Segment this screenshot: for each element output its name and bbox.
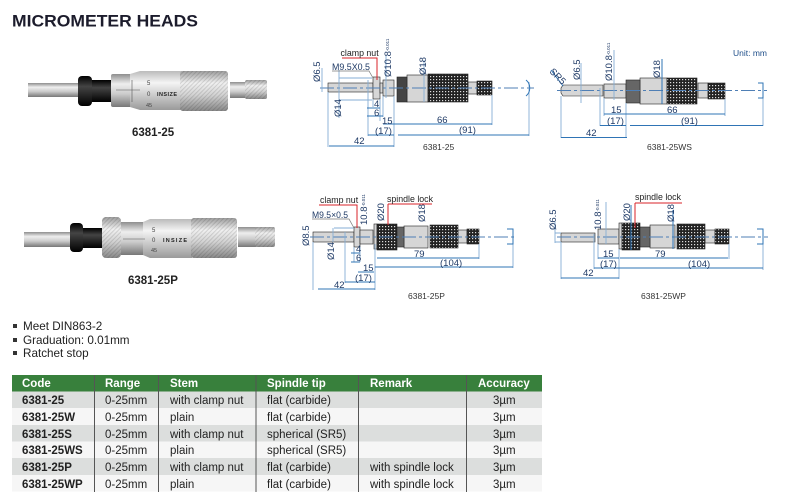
table rows: with spindle lock	[369, 479, 454, 491]
table rows: 3µm	[493, 395, 516, 407]
drawing: 6381-25P: spindle lock	[387, 194, 434, 204]
table rows: flat (carbide)	[267, 462, 331, 474]
drawing: 6381-25WP: 6381-25WP	[641, 291, 686, 301]
table rows: with clamp nut	[169, 429, 244, 441]
drawing: 6381-25P: 10.8	[359, 206, 370, 225]
drawing: 6381-25: Ø10.8	[383, 51, 394, 77]
photo: micrometer head 6381-25P: 45	[151, 248, 157, 254]
drawing: 6381-25WS: (91)	[681, 116, 698, 127]
drawing: 6381-25P: 6	[356, 253, 361, 264]
table rows: plain	[170, 445, 194, 457]
drawing: 6381-25WP: (17)	[600, 259, 617, 270]
drawing: 6381-25WS: 15	[611, 105, 622, 116]
table rows: with clamp nut	[169, 395, 244, 407]
drawing: 6381-25P: clamp nut	[320, 195, 359, 205]
drawing: 6381-25: Ø18	[418, 57, 429, 75]
table header: Accuracy	[478, 378, 530, 390]
drawing: 6381-25WS: (17)	[607, 116, 624, 127]
drawing: 6381-25: (91)	[459, 125, 476, 136]
photo label 6381-25P: 6381-25P	[128, 275, 178, 287]
drawing: 6381-25WS: Ø18	[652, 60, 663, 78]
drawing: 6381-25: 15	[382, 116, 393, 127]
drawing: 6381-25: (17)	[375, 126, 392, 137]
drawing: 6381-25P: (104)	[440, 258, 462, 269]
table header: Stem	[170, 378, 198, 390]
drawing: 6381-25WP: -0.011	[595, 199, 600, 212]
feature list: Graduation: 0.01mm	[23, 334, 130, 347]
table rows	[12, 375, 542, 492]
feature list: Meet DIN863-2	[23, 320, 102, 333]
specification table	[12, 375, 542, 492]
table rows: 6381-25S	[22, 429, 72, 441]
table rows: 3µm	[493, 412, 516, 424]
drawing: 6381-25WS	[547, 42, 767, 152]
drawing: 6381-25WS: -0.011	[606, 42, 611, 55]
drawing: 6381-25WS: 66	[667, 105, 678, 116]
table rows: 0-25mm	[105, 395, 147, 407]
drawing: 6381-25WP: 42	[583, 268, 594, 279]
table rows: 6381-25P	[22, 462, 72, 474]
drawing: 6381-25WP: 79	[655, 249, 666, 260]
drawing: 6381-25WS: Ø6.5	[572, 59, 583, 80]
drawing: 6381-25WS: Ø10.8	[604, 55, 615, 81]
table rows: plain	[170, 479, 194, 491]
drawing: 6381-25P: 15	[363, 263, 374, 274]
table rows: 6381-25	[22, 395, 65, 407]
photo: micrometer head 6381-25: 0	[147, 92, 151, 98]
table rows: 3µm	[493, 479, 516, 491]
drawing: 6381-25: 66	[437, 115, 448, 126]
table rows: 6381-25WS	[22, 445, 83, 457]
table rows: 0-25mm	[105, 429, 147, 441]
table rows: 6381-25W	[22, 412, 75, 424]
drawing: 6381-25P: 4	[356, 244, 361, 255]
photo: micrometer head 6381-25P: INSIZE	[163, 238, 187, 244]
table rows: 0-25mm	[105, 412, 147, 424]
drawing: 6381-25P: Ø18	[417, 204, 428, 222]
table rows: flat (carbide)	[267, 395, 331, 407]
photo: micrometer head 6381-25	[28, 71, 267, 111]
drawing: 6381-25WS: SR5	[547, 66, 568, 87]
drawing: 6381-25WP: 15	[603, 249, 614, 260]
table rows: 0-25mm	[105, 479, 147, 491]
drawing: 6381-25: 6	[374, 108, 379, 119]
drawing: 6381-25P: M9.5×0.5	[312, 210, 348, 221]
drawing: 6381-25: 42	[354, 136, 365, 147]
table header	[12, 375, 542, 392]
table rows: spherical (SR5)	[267, 445, 346, 457]
feature list	[13, 320, 130, 360]
table rows: 3µm	[493, 429, 516, 441]
title: MICROMETER HEADS	[12, 12, 198, 30]
drawing: 6381-25: 4	[374, 99, 379, 110]
drawing: 6381-25: Ø14	[333, 99, 344, 117]
table rows: 6381-25WP	[22, 479, 83, 491]
photo: micrometer head 6381-25P: 5	[152, 228, 156, 234]
drawing: 6381-25P: 79	[414, 249, 425, 260]
drawing: 6381-25P: Ø14	[326, 242, 337, 260]
table rows: 3µm	[493, 462, 516, 474]
drawing: 6381-25P: 42	[334, 280, 345, 291]
table header: Code	[22, 378, 51, 390]
drawing: 6381-25WP: Ø6.5	[548, 209, 559, 230]
drawing: 6381-25WP: spindle lock	[635, 192, 682, 202]
table header: Range	[105, 378, 140, 390]
drawing: 6381-25P: Ø20	[376, 203, 387, 221]
table rows: 3µm	[493, 445, 516, 457]
drawing: 6381-25: Ø6.5	[312, 61, 323, 82]
photo: micrometer head 6381-25P	[24, 217, 275, 258]
drawing: 6381-25P: 6381-25P	[408, 291, 445, 301]
drawing: 6381-25WS: 6381-25WS	[647, 142, 692, 152]
table rows: with spindle lock	[369, 462, 454, 474]
photo: micrometer head 6381-25: INSIZE	[157, 92, 177, 98]
drawing: 6381-25	[312, 38, 534, 152]
table header: Spindle tip	[267, 378, 326, 390]
drawing: 6381-25: -0.011	[385, 38, 390, 51]
photo: micrometer head 6381-25P: 0	[152, 238, 156, 244]
table rows: with clamp nut	[169, 462, 244, 474]
drawing: 6381-25P: Ø8.5	[301, 225, 312, 246]
table rows: flat (carbide)	[267, 412, 331, 424]
photo: micrometer head 6381-25: 45	[146, 103, 152, 109]
table header: Remark	[370, 378, 413, 390]
drawing: 6381-25WP: Ø18	[666, 204, 677, 222]
drawing: 6381-25WP: Ø20	[622, 203, 633, 221]
drawing: 6381-25: 6381-25	[423, 142, 454, 152]
feature list: Ratchet stop	[23, 347, 89, 360]
drawing: 6381-25WS: 42	[586, 128, 597, 139]
drawing: 6381-25P: -0.011	[361, 194, 366, 206]
photo label 6381-25: 6381-25	[132, 127, 175, 139]
unit note: Unit: mm	[733, 48, 767, 58]
drawing: 6381-25: M9.5X0.5	[332, 62, 370, 73]
drawing: 6381-25WP: (104)	[688, 259, 710, 270]
drawing: 6381-25P	[301, 194, 515, 301]
table rows: plain	[170, 412, 194, 424]
table rows: flat (carbide)	[267, 479, 331, 491]
photo: micrometer head 6381-25: 5	[147, 81, 151, 87]
drawing: 6381-25P: (17)	[355, 273, 372, 284]
table rows: 0-25mm	[105, 462, 147, 474]
drawing: 6381-25WP: 10.8	[593, 212, 604, 230]
drawing: 6381-25: clamp nut	[340, 48, 379, 58]
table rows: spherical (SR5)	[267, 429, 346, 441]
table rows: 0-25mm	[105, 445, 147, 457]
drawing: 6381-25WP	[548, 192, 768, 301]
